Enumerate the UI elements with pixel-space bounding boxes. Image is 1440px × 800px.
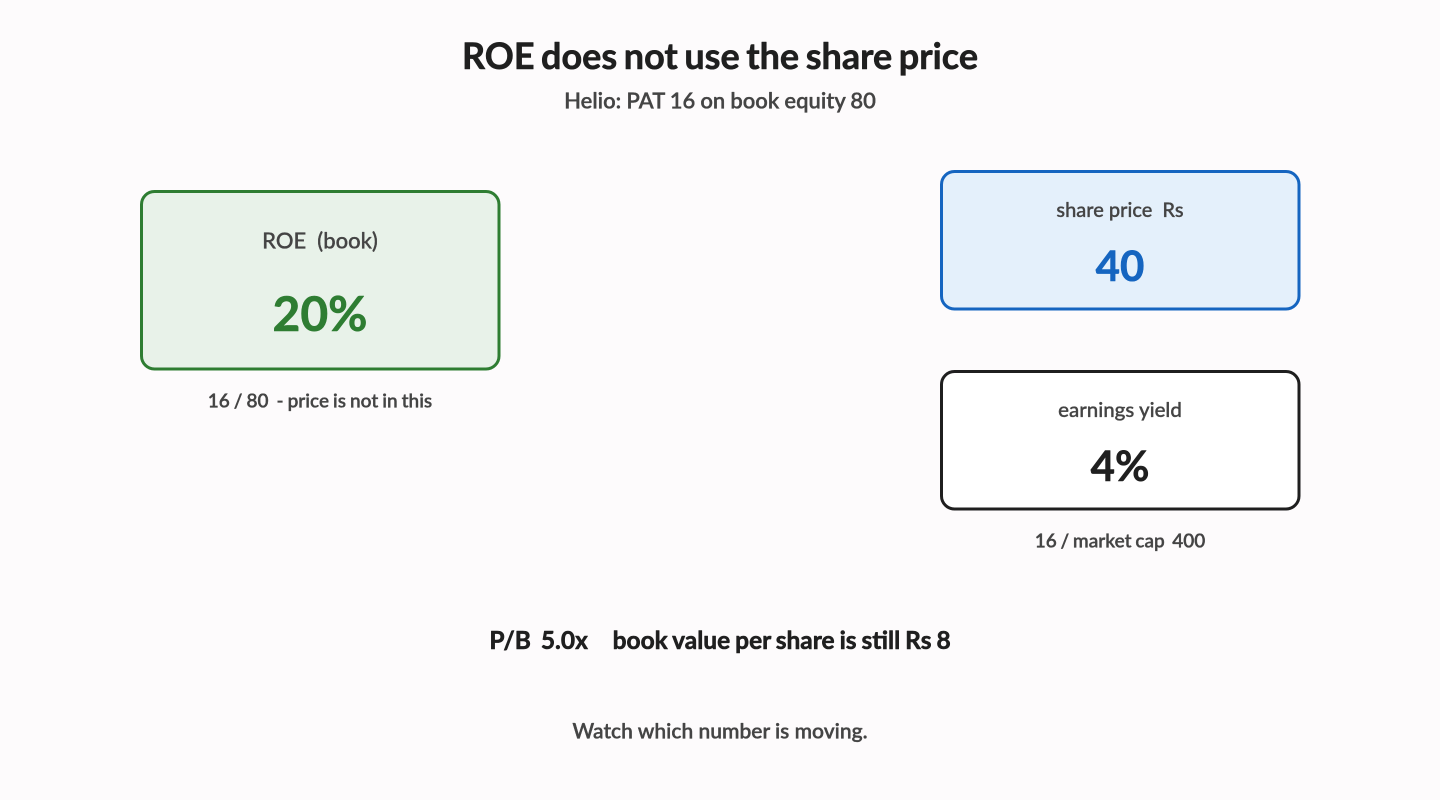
share price value: 40 <box>1096 240 1144 290</box>
ROE note: 16 / 80 - price is not in this <box>208 390 432 412</box>
ROE label: ROE (book) <box>262 226 378 254</box>
title: ROE does not use the share price <box>462 33 978 77</box>
panel: ROE <box>142 192 499 369</box>
subtitle: Helio: PAT 16 on book equity 80 <box>564 86 876 114</box>
share price label: share price Rs <box>1056 198 1184 222</box>
ROE value: 20% <box>272 285 368 342</box>
panel: earnings yield <box>942 372 1299 509</box>
earnings yield label: earnings yield <box>1058 398 1182 422</box>
earnings yield note: 16 / market cap 400 <box>1035 530 1205 552</box>
panel: share price <box>942 172 1299 309</box>
earnings yield value: 4% <box>1091 440 1149 490</box>
closing note: Watch which number is moving. <box>572 718 868 744</box>
P/B statement: P/B 5.0x book value per share is still Rs 8 <box>489 626 951 655</box>
